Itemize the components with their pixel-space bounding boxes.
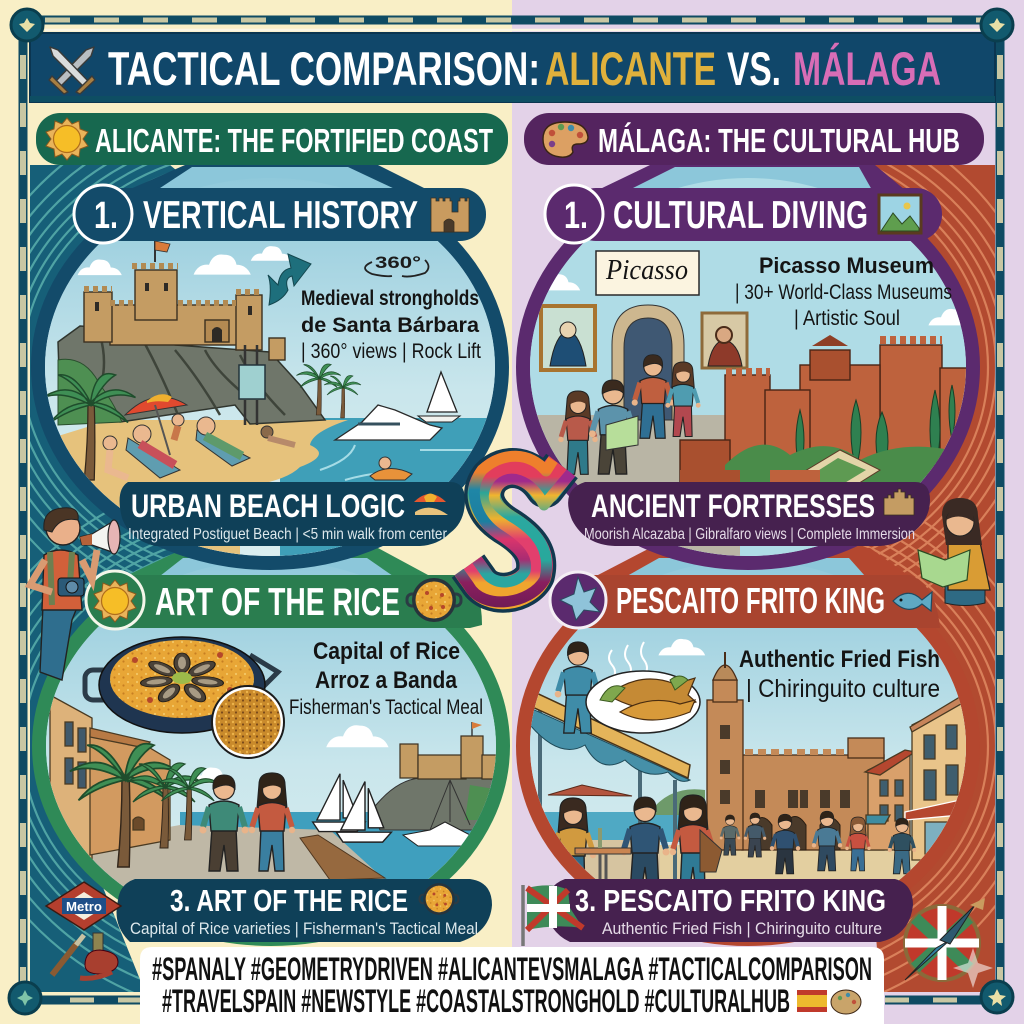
header: Alicante: ALICANTE: THE FORTIFIED COAST — [95, 122, 493, 159]
icon: star fish badge — [550, 572, 606, 628]
icon: small fortress — [884, 489, 914, 515]
town buildings — [865, 692, 968, 860]
background: Alicante cream side — [0, 0, 512, 1024]
icon: paella small — [420, 883, 458, 915]
panel: Cultural Diving circle — [510, 165, 990, 575]
banner: 3. Pescaito Frito King — [523, 879, 913, 946]
banner: 1. Cultural Diving: 1. — [564, 195, 588, 237]
icon: rock lift — [245, 345, 257, 425]
couple walking — [200, 775, 248, 871]
icon: tourist with megaphone — [30, 508, 120, 680]
icon: sun badge — [86, 571, 144, 629]
icon: Spanish flag — [797, 990, 827, 1012]
callout: Picasso Museum text: Picasso Museum — [759, 253, 934, 278]
yacht — [335, 405, 442, 440]
callout: Capital of Rice text — [289, 638, 483, 719]
banner: 1. Cultural Diving — [545, 185, 942, 243]
plate of fried fish — [586, 671, 700, 733]
callout: Santa Bárbara text: | 360° views | Rock Lift — [301, 340, 481, 363]
banner: 3. Art of the Rice — [116, 879, 492, 942]
icon: Metro sign — [46, 882, 121, 930]
promenade — [79, 825, 384, 886]
decorative pattern: Málaga waves — [853, 165, 995, 992]
header: Alicante — [36, 113, 508, 165]
icon: fish — [893, 592, 932, 611]
banner: Pescaito Frito King header: PESCAITO FRITO KING — [616, 580, 885, 621]
rice close-up — [214, 688, 282, 756]
callout: Authentic Fried Fish text: | Chiringuito culture — [746, 675, 940, 703]
map — [606, 416, 638, 450]
square ground — [660, 845, 929, 880]
callout: Santa Bárbara text — [301, 287, 481, 363]
sea and harbour — [180, 812, 482, 879]
banner: 1. Vertical History: VERTICAL HISTORY — [143, 194, 418, 237]
icon: castle — [431, 198, 469, 232]
callout: Picasso Museum text — [735, 253, 952, 330]
banner: Pescaito Frito King header — [550, 572, 940, 628]
boats — [313, 774, 365, 832]
banner: 3. Art of the Rice: Capital of Rice varieties | Fisherman's Tactical Meal — [130, 919, 478, 938]
sea — [280, 418, 486, 556]
number badge — [545, 185, 603, 243]
title text: TACTICAL COMPARISON: — [108, 42, 540, 95]
banner: Urban Beach Logic: Integrated Postiguet Beach | <5 min walk from center — [128, 526, 448, 543]
banner: Art of the Rice header — [86, 571, 482, 629]
callout: Santa Bárbara text: Medieval strongholds — [301, 287, 479, 310]
sea and hill — [544, 812, 680, 842]
callout: Santa Bárbara text: de Santa Bárbara — [301, 314, 479, 337]
palm trees — [43, 374, 136, 480]
Alcazaba fortress — [680, 345, 970, 485]
palm trees — [70, 744, 177, 867]
S logo — [459, 456, 571, 602]
background: Málaga lilac side — [512, 0, 1024, 1024]
icon: paella — [407, 578, 461, 622]
360 icon — [365, 253, 428, 277]
ground — [537, 415, 740, 556]
painting: portrait left — [541, 306, 595, 370]
banner: 3. Art of the Rice: 3. ART OF THE RICE — [170, 883, 408, 918]
hill and castle — [372, 775, 498, 830]
Picasso signature: Picasso — [605, 255, 688, 286]
banner: Art of the Rice header: ART OF THE RICE — [155, 581, 400, 624]
banner: Urban Beach Logic — [120, 482, 465, 546]
swimmer — [370, 468, 412, 480]
gardens — [725, 445, 950, 490]
callout: Capital of Rice text: Capital of Rice — [313, 638, 460, 665]
title banner — [30, 33, 995, 102]
banner: Ancient Fortresses: ANCIENT FORTRESSES — [591, 488, 875, 524]
callout: Picasso Museum text: | 30+ World-Class Museums — [735, 281, 952, 304]
banner: 1. Cultural Diving: CULTURAL DIVING — [613, 194, 868, 237]
Picasso sign — [596, 251, 699, 295]
banner: 1. Vertical History — [74, 185, 486, 243]
title banner: VS. — [727, 42, 781, 95]
castle — [84, 270, 285, 360]
cypress trees — [796, 385, 955, 475]
rock cliff — [58, 326, 325, 424]
icon: Metro sign: Metro — [66, 899, 102, 914]
sunbathers — [103, 414, 295, 478]
door arch — [612, 305, 684, 420]
icon: crossed swords — [49, 47, 95, 94]
callout: Authentic Fried Fish text: Authentic Fried Fish — [739, 646, 940, 673]
steam — [609, 642, 647, 680]
number badge — [74, 185, 132, 243]
diners — [556, 797, 596, 870]
buildings — [50, 695, 170, 860]
waiter — [555, 642, 601, 733]
hashtag box — [140, 947, 884, 1024]
title banner: ALICANTE — [545, 42, 716, 95]
icon: beach umbrella — [414, 494, 448, 515]
cathedral — [707, 665, 884, 850]
banner: Urban Beach Logic: URBAN BEACH LOGIC — [131, 488, 405, 524]
icon: woman with map — [918, 498, 990, 606]
icon: palette — [543, 122, 588, 157]
header: Málaga — [524, 113, 984, 165]
callout: Capital of Rice text: Arroz a Banda — [315, 667, 458, 694]
callout: Capital of Rice text: Fisherman's Tactical Meal — [289, 696, 483, 719]
icon: landscape picture — [879, 195, 921, 233]
beach — [60, 420, 348, 554]
panel: Art of the Rice circle — [30, 545, 510, 945]
icon: palette small — [831, 990, 861, 1014]
title banner: MÁLAGA — [793, 42, 941, 95]
banner: 3. Pescaito Frito King: 3. PESCAITO FRITO KING — [575, 883, 886, 918]
banner: 1. Vertical History: 1. — [94, 195, 118, 237]
decorative pattern: Alicante waves — [30, 165, 176, 992]
arrow — [268, 254, 311, 305]
icon: compass — [905, 898, 993, 988]
banner: Ancient Fortresses — [568, 482, 930, 546]
awning and terrace — [540, 708, 675, 880]
callout: Authentic Fried Fish text — [739, 646, 940, 703]
icon: Basque flag — [523, 885, 583, 946]
banner: Ancient Fortresses: Moorish Alcazaba | Gibralfaro views | Complete Immersion — [584, 526, 915, 543]
icon: sun — [46, 118, 88, 160]
paella pan — [85, 637, 278, 733]
icon: tools and chorizo — [52, 933, 118, 978]
pedestrians — [720, 815, 740, 855]
360 icon: 360° — [375, 253, 421, 272]
sailboat — [427, 372, 457, 412]
visitors — [558, 391, 598, 474]
panel: Pescaito Frito King circle — [510, 545, 990, 950]
painting: portrait right — [702, 313, 747, 368]
umbrella — [125, 397, 187, 415]
banner: 3. Pescaito Frito King: Authentic Fried Fish | Chiringuito culture — [602, 919, 882, 938]
panel: Vertical History circle — [30, 165, 510, 578]
callout: Picasso Museum text: | Artistic Soul — [794, 307, 900, 330]
